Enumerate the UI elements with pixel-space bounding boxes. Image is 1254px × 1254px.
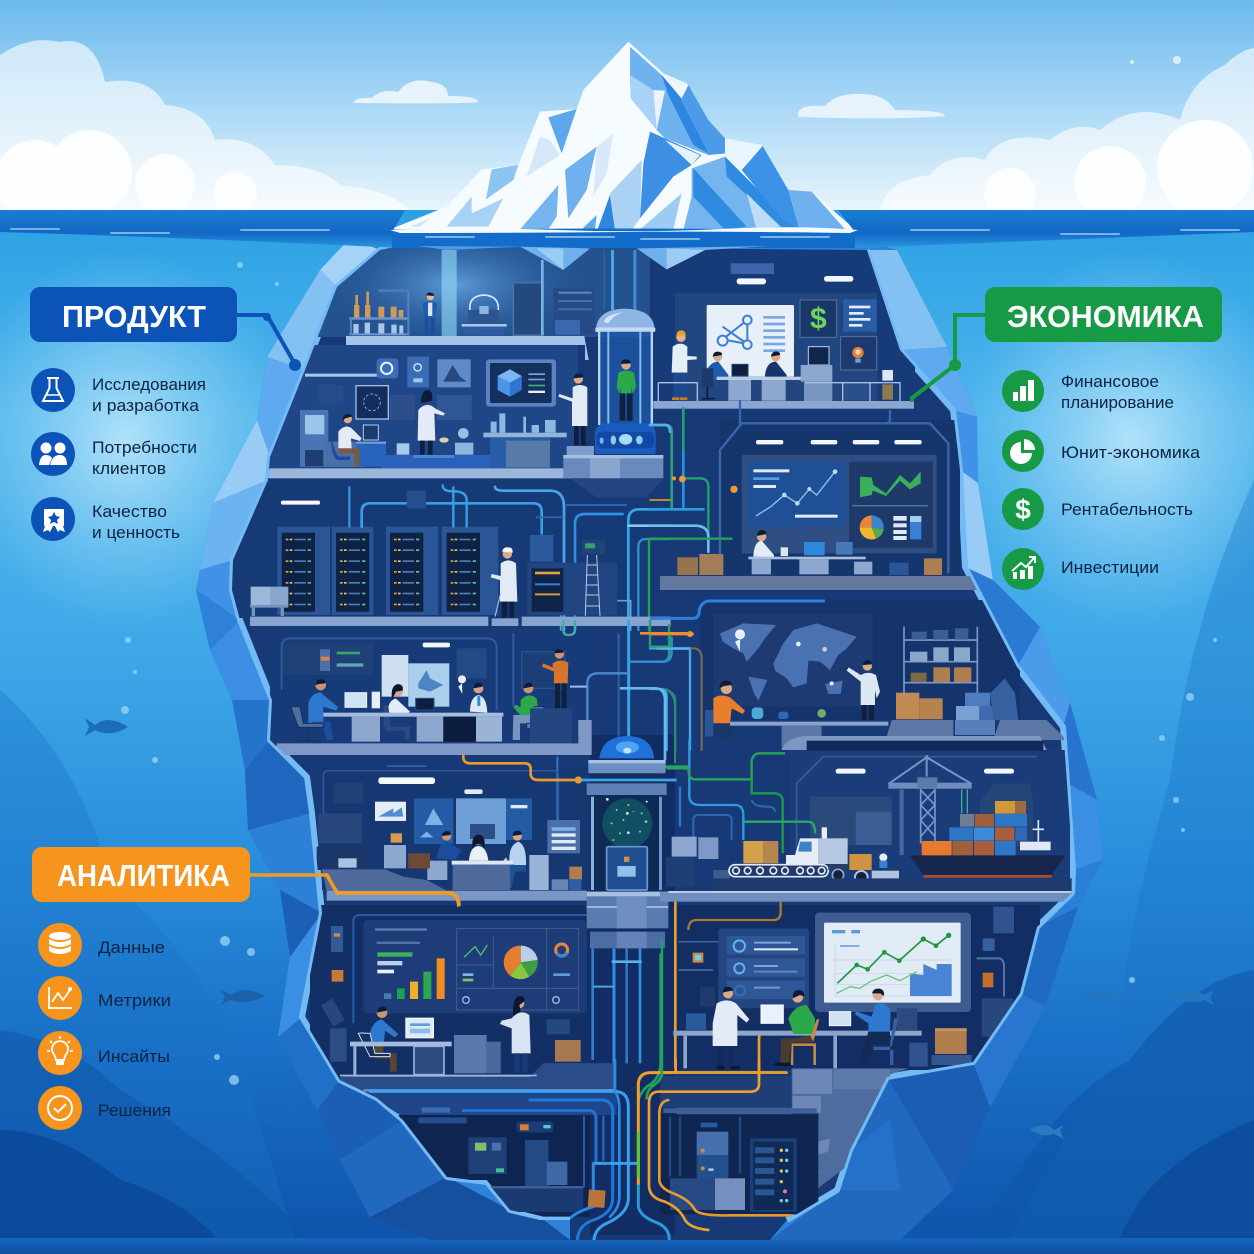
office: green-shirt worker [513, 683, 544, 740]
presentation room: small widgets [686, 953, 715, 1030]
item: качество и ценность: и ценность [92, 523, 180, 542]
meeting room: equipment [317, 833, 447, 891]
item: данные: Данные [98, 938, 165, 957]
second lab: scientist man [558, 373, 587, 445]
fish [85, 718, 1214, 1139]
finance room: seated people and desk [702, 351, 893, 401]
cave interior [230, 225, 1073, 1240]
cloud: small left [354, 80, 478, 103]
finance room: floor [653, 401, 914, 409]
iceberg: underwater ice body [196, 236, 1103, 1240]
loading bay: truck [786, 827, 872, 884]
loading bay: ship [910, 801, 1066, 878]
item: качество и ценность [31, 497, 180, 542]
item: финансовое планирование: Финансовое [1061, 372, 1159, 391]
server room: pipes [349, 485, 670, 630]
meeting room: floor [327, 891, 587, 901]
bubbles [121, 262, 1217, 1085]
cloud: small right [798, 94, 945, 118]
dashboard room: scientist [500, 996, 531, 1073]
analytics room: floor [660, 576, 978, 590]
floor band [660, 1076, 792, 1114]
dashboard room: cabinets and box [454, 1019, 581, 1073]
panel: аналитика [32, 847, 250, 1130]
finance room: bulb panel [841, 337, 877, 370]
left upper facets [196, 238, 570, 1240]
sky bubbles [1130, 56, 1181, 64]
meeting room: people at table [437, 831, 526, 890]
server room: junction box [407, 491, 426, 508]
item: инвестиции: Инвестиции [1061, 558, 1159, 577]
heading: продукт: ПРОДУКТ [62, 299, 206, 334]
connector: продукт [237, 313, 301, 371]
analytics room: pipe frame [720, 400, 948, 573]
item: рентабельность: $ [1015, 494, 1031, 525]
connector: аналитика [250, 875, 459, 906]
capsule pedestal [563, 446, 663, 497]
second lab: seated person and cabinet [300, 410, 386, 467]
bottom: orange and green pipes [638, 1060, 790, 1230]
bottom: right-side floor [663, 1108, 817, 1113]
dashboard room: seated analyst [350, 1007, 452, 1075]
connector: экономика [912, 315, 985, 402]
central pipes right of capsule [650, 408, 732, 750]
capsule elevator [595, 309, 656, 454]
item: рентабельность: Рентабельность [1061, 500, 1193, 519]
finance room: standing engineer [672, 330, 697, 400]
office: desk [323, 713, 503, 742]
second lab: wall icons [355, 356, 472, 420]
sky [0, 0, 1254, 212]
second lab: scientist woman [418, 390, 445, 455]
loading bay: machines [666, 837, 730, 888]
pipe joints [672, 476, 738, 637]
storage room [660, 1114, 818, 1214]
meeting room: lights [378, 765, 483, 794]
office: light [423, 643, 450, 647]
heading: аналитика: АНАЛИТИКА [57, 858, 230, 893]
loading bay: crane [888, 755, 972, 855]
dashboard room: side widgets [321, 926, 347, 1062]
reactor [587, 736, 668, 948]
presentation room: desk [673, 1005, 922, 1068]
map room: shelf [904, 627, 977, 693]
reactor: lower pipes [593, 787, 680, 1100]
server room: racks [277, 527, 498, 615]
item: инвестиции [1002, 548, 1159, 590]
map room: boxes [896, 678, 1018, 735]
office: floor [277, 720, 592, 755]
item: юнит-экономика: Юнит-экономика [1061, 443, 1201, 462]
finance room: monitor [808, 347, 829, 365]
meeting room: pipe frame [323, 771, 558, 823]
server room: ceiling light [281, 501, 320, 505]
floor 1: pipe [305, 374, 380, 377]
ice inner rim [232, 246, 570, 1217]
heading: продукт [30, 287, 237, 342]
office: monitors [345, 692, 434, 710]
server room: crates [250, 587, 288, 616]
underwater ice tips [418, 246, 768, 270]
bottom rooms and pipes [340, 1060, 817, 1240]
office: blue-shirt worker [291, 679, 338, 741]
office: seated colleague [458, 675, 487, 713]
left lower rooms and reactor [277, 620, 690, 1100]
presentation room: right widgets [977, 907, 1014, 1037]
analytics room: lights [756, 440, 922, 444]
second lab: benches [382, 413, 567, 468]
map room: presenter [847, 660, 880, 720]
item: исследования и разработка: и разработка [92, 396, 200, 415]
finance room: railing [658, 383, 900, 401]
item: рентабельность [1002, 488, 1193, 530]
finance room: lights [737, 276, 853, 284]
loading bay: crates [743, 841, 778, 863]
finance room: dollar panel: $ [810, 303, 827, 336]
iceberg above water [390, 42, 855, 230]
item: метрики [38, 976, 171, 1020]
server room: technician [491, 547, 517, 618]
item: качество и ценность: Качество [92, 502, 167, 521]
map room: pipe [650, 601, 825, 618]
item: инсайты [38, 1031, 170, 1075]
upper-left labs and server room [250, 250, 671, 630]
item: юнит-экономика [1002, 430, 1201, 472]
panel: экономика [985, 287, 1222, 590]
analytics room: desk and people [748, 530, 872, 574]
office: standing technician [530, 649, 572, 743]
second lab: big cube screen [486, 359, 556, 407]
room backgrounds [230, 225, 1070, 1235]
loading bay: lights [836, 769, 1014, 774]
office: woman at desk [383, 684, 410, 739]
analytics connector pipe [327, 875, 458, 907]
left bottom floors [340, 1063, 617, 1115]
loading bay: robot and cart [872, 853, 899, 883]
cave base [232, 246, 1073, 1240]
presentation room: green-sweater colleague [775, 990, 819, 1066]
item: данные [38, 923, 165, 967]
map room: analyst and desk [705, 681, 888, 749]
presentation room: box and cabinet [909, 1028, 972, 1067]
item: финансовое планирование: планирование [1061, 393, 1174, 412]
item: финансовое планирование [1002, 370, 1174, 412]
panel: продукт [30, 287, 237, 542]
rock wall [792, 1068, 908, 1217]
presentation room: list panel [718, 928, 809, 1008]
loading bay: frame and wall blocks [797, 757, 1037, 855]
finance room: dollar panel [800, 300, 837, 337]
map room: world map [713, 613, 873, 707]
finance room: ceiling panel [731, 263, 774, 274]
top lab: door and shelves [513, 250, 636, 335]
presentation room: doctor [713, 987, 749, 1069]
finance room: wall [675, 293, 877, 401]
orange pipes [660, 902, 817, 1091]
bottom: blue pipes [370, 1060, 669, 1240]
analytics room: big screen [742, 455, 937, 553]
ice inner rim right [787, 250, 1073, 1220]
presentation room: growth screen [815, 913, 971, 1012]
item: решения: Решения [98, 1101, 171, 1120]
seabed: rock silhouettes [0, 480, 1254, 1254]
item: исследования и разработка: Исследования [92, 375, 206, 394]
pipes [660, 740, 815, 853]
water surface [0, 210, 1254, 248]
left bottom room [398, 1107, 590, 1217]
item: исследования и разработка [31, 368, 206, 415]
office: pipe frame [282, 633, 513, 710]
office-to-reactor orange pipe [463, 755, 676, 784]
analytics room: boxes [677, 554, 942, 575]
item: потребности клиентов: Потребности [92, 438, 197, 457]
right facets [770, 250, 1103, 1240]
loading bay: conveyor [729, 865, 828, 877]
item: инсайты: Инсайты [98, 1047, 170, 1066]
heading: экономика [985, 287, 1222, 342]
item: потребности клиентов [31, 432, 197, 478]
meeting room: wall panels [318, 783, 532, 844]
office: wall panels [283, 643, 565, 707]
dashboard room: pipe frame [353, 915, 587, 1023]
item: решения [38, 1086, 171, 1130]
heading: аналитика [32, 847, 250, 902]
heading: экономика: ЭКОНОМИКА [1007, 299, 1204, 334]
ocean light left [0, 250, 295, 630]
item: потребности клиентов: клиентов [92, 459, 166, 478]
right upper rooms [650, 263, 1067, 751]
bottom: box on pipes [588, 1189, 606, 1208]
map room: platforms [782, 720, 1067, 751]
top lab: bottle shelf [349, 289, 409, 335]
floor 1 [346, 336, 589, 360]
iceberg: peak [390, 42, 855, 230]
presentation room: blue-shirt colleague [855, 989, 898, 1065]
central pipes [557, 620, 690, 820]
finance room: whiteboard [707, 305, 794, 377]
finance room: list panel [843, 299, 877, 332]
loading bay: floor [660, 878, 1073, 902]
cloud: left [0, 40, 410, 220]
ocean light right [960, 250, 1254, 630]
top lab: machine on table [462, 295, 507, 335]
top lab: light beam [442, 250, 457, 336]
dashboard room: main dashboard [363, 920, 587, 1013]
cloud: right [880, 48, 1254, 220]
top lab: person [423, 293, 437, 335]
item: метрики: Метрики [98, 991, 171, 1010]
floor 3 [250, 617, 671, 626]
right lower rooms [660, 740, 1073, 1217]
meeting room: cabinets [529, 820, 582, 890]
server room: cabinet and ladder [527, 535, 617, 616]
floor 2 [269, 468, 571, 478]
dashboard room: floor [343, 1063, 610, 1088]
